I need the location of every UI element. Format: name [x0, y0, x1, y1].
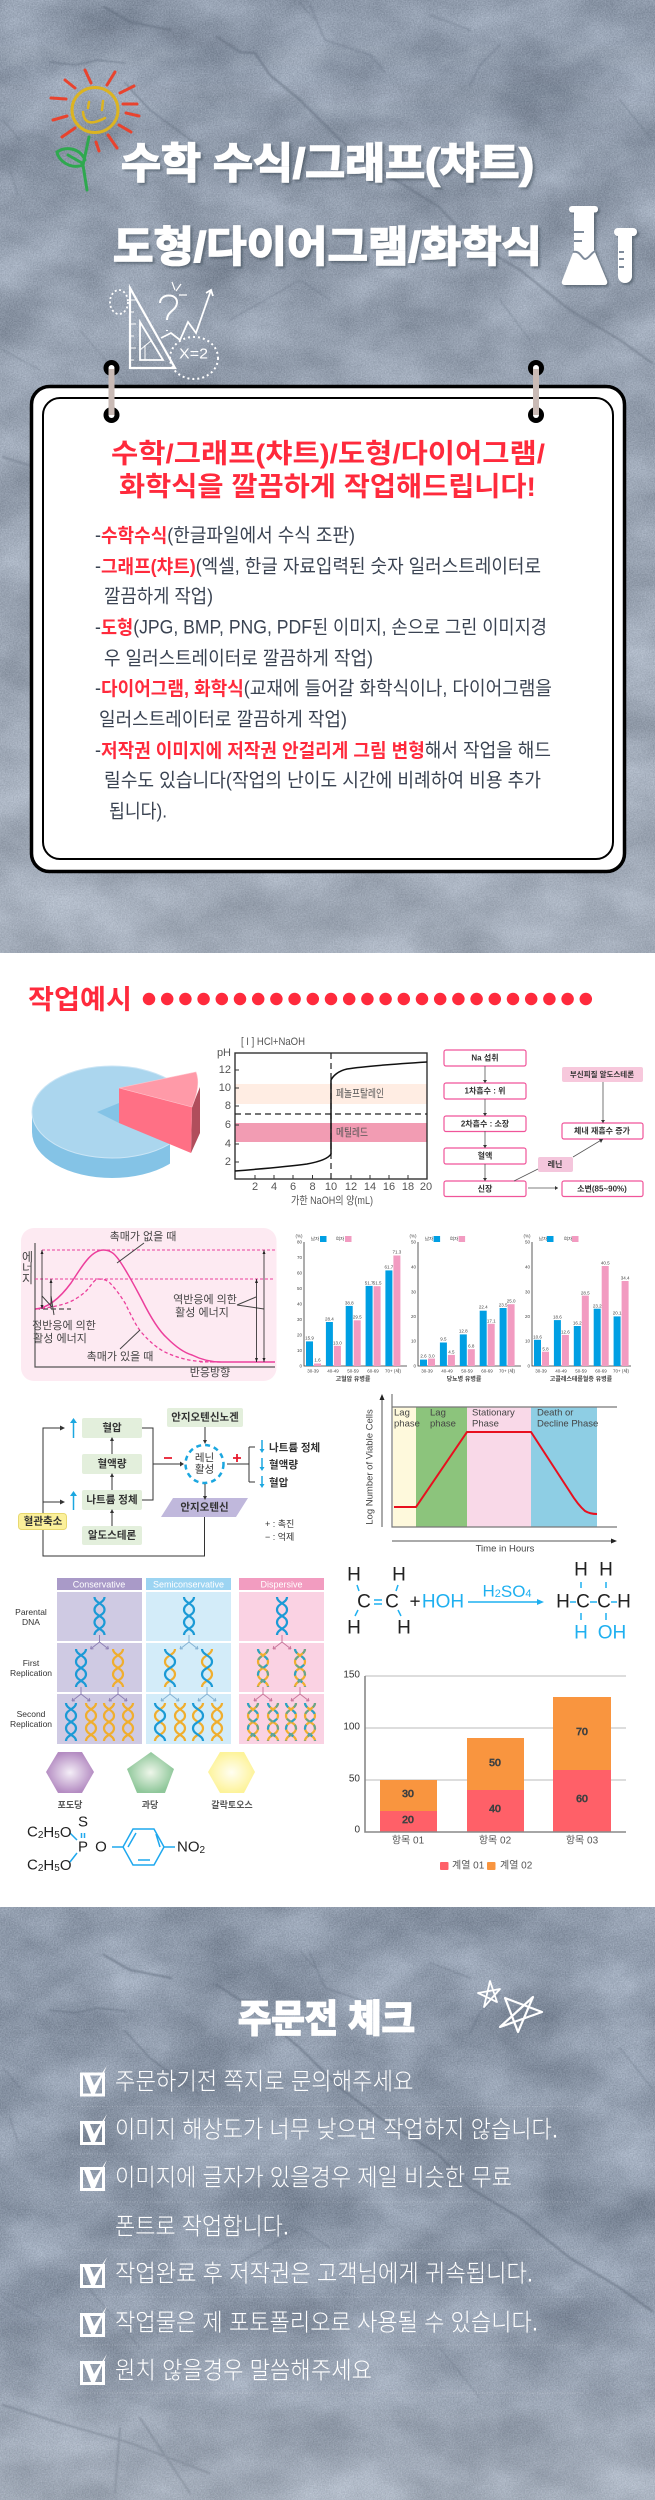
chart: diabetes prevalence bars: 10 — [411, 1338, 416, 1344]
chart: bacterial growth curve: Lag — [394, 1408, 410, 1418]
chart: diabetes prevalence bars: 20 — [411, 1314, 416, 1319]
chart: bacterial growth curve — [364, 1394, 617, 1554]
card body text: 됩니다). — [109, 800, 167, 822]
chart: cholesterol prevalence bars: 남자 — [539, 1236, 548, 1242]
chart: titration curve: 4 — [225, 1138, 231, 1150]
chart: hypertension prevalence bars: 29.5 — [353, 1314, 362, 1320]
chart: catalyst energy diagram: 활성 에너지 — [175, 1305, 229, 1319]
icon: right hanger ring — [528, 360, 544, 423]
chart: diabetes prevalence bars: 당뇨병 유병률 — [447, 1375, 482, 1383]
chart: diabetes prevalence bars: 50 — [411, 1240, 416, 1244]
chart: hypertension prevalence bars: 51.5 — [373, 1280, 382, 1286]
chart: diabetes prevalence bars: 12.8 — [459, 1328, 468, 1334]
list: checklist: 이미지 해상도가 너무 낮으면 작업하지 않습니다. — [115, 2116, 558, 2144]
chart: titration curve: 4 — [271, 1181, 277, 1193]
chart: diabetes prevalence bars: 40-49 — [441, 1368, 453, 1374]
formula: parathion structure: S — [78, 1814, 88, 1830]
chart: titration curve: 16 — [383, 1181, 395, 1193]
chart: hypertension prevalence bars: 10 — [297, 1348, 302, 1353]
diagram: sodium flow chart: 체내 재흡수 증가 — [574, 1126, 631, 1136]
chart: titration curve: 10 — [219, 1082, 231, 1094]
chart: catalyst energy diagram: 너 — [22, 1261, 33, 1275]
chart: titration curve: 18 — [402, 1181, 414, 1193]
chart: cholesterol prevalence bars: 10 — [525, 1338, 530, 1344]
chart: cholesterol prevalence bars: 20.1 — [613, 1310, 622, 1316]
formula: ethene hydration: SO — [501, 1582, 525, 1600]
chart: cholesterol prevalence bars: 50-59 — [575, 1368, 587, 1374]
chart: cholesterol prevalence bars: 0 — [527, 1364, 530, 1368]
chart: hypertension prevalence bars: 30 — [297, 1317, 302, 1322]
chart: hypertension prevalence bars: 1.6 — [314, 1358, 321, 1362]
formula: parathion structure — [27, 1814, 206, 1874]
chart: hypertension prevalence bars: 70 — [297, 1255, 302, 1260]
chart: titration curve: 8 — [225, 1100, 231, 1112]
icon: sunflower doodle — [51, 70, 139, 190]
icon: fructose pentagon: 과당 — [142, 1799, 159, 1810]
formula: ethene hydration: OH — [598, 1622, 626, 1644]
chart: diabetes prevalence bars: 30-39 — [421, 1368, 433, 1374]
chart: stacked bars: 150 — [343, 1670, 360, 1680]
chart: titration curve — [217, 1036, 432, 1207]
chart: hypertension prevalence bars: 50-59 — [347, 1368, 359, 1374]
chart: cholesterol prevalence bars: 5.8 — [542, 1346, 549, 1352]
chart: bacterial growth curve: Phase — [472, 1418, 499, 1430]
chart: hypertension prevalence bars: 0 — [299, 1364, 302, 1368]
diagram: renin angiotensin: 혈압 — [269, 1476, 289, 1489]
chart: bacterial growth curve: phase — [430, 1418, 456, 1430]
formula: ethene hydration: + — [409, 1592, 421, 1612]
chart: cholesterol prevalence bars: 30-39 — [535, 1368, 547, 1374]
chart: catalyst energy diagram: 지 — [22, 1272, 33, 1286]
icon: math doodle — [110, 282, 218, 379]
list: checklist: 작업완료 후 저작권은 고객님에게 귀속됩니다. — [115, 2260, 533, 2288]
chart: titration curve: 12 — [345, 1181, 357, 1193]
diagram: DNA replication models: Replication — [10, 1719, 52, 1729]
chart: stacked bars: 항목 03 — [566, 1834, 599, 1846]
card body text — [95, 524, 552, 822]
chart: bacterial growth curve: Death or — [537, 1408, 573, 1418]
card body text: 일러스트레이터로 깔끔하게 작업) — [99, 708, 347, 730]
chart: hypertension prevalence bars: 28.4 — [325, 1316, 334, 1322]
icon: math doodle: X=2 — [179, 346, 208, 362]
chart: diabetes prevalence bars: 40 — [411, 1264, 416, 1270]
chart: hypertension prevalence bars: 20 — [297, 1332, 302, 1338]
icon: left hanger ring — [104, 360, 120, 423]
formula: ethene hydration: C — [357, 1592, 371, 1612]
chart: diabetes prevalence bars: 2.6 — [420, 1354, 427, 1358]
chart: diabetes prevalence bars — [410, 1234, 521, 1383]
formula: parathion structure: 5 — [54, 1830, 60, 1840]
chart: cholesterol prevalence bars: 34.4 — [621, 1276, 630, 1280]
chart: catalyst energy diagram: 정반응에 의한 — [32, 1319, 96, 1332]
formula: ethene hydration: C — [597, 1592, 611, 1612]
title: line 1: 수학 수식/그래프(챠트) — [121, 140, 534, 187]
diagram: renin angiotensin: 혈액량 — [269, 1458, 298, 1471]
chart: stacked bars: 50 — [349, 1774, 360, 1784]
chart: stacked bars: 항목 01 — [392, 1834, 425, 1846]
chart: stacked bars: 20 — [402, 1814, 414, 1826]
icon: galactose hexagon: 갈락토오스 — [211, 1799, 253, 1810]
panel: bottom marble background — [0, 1907, 655, 2500]
chart: titration curve: 페놀프탈레인 — [336, 1087, 384, 1100]
chart: cholesterol prevalence bars: 50 — [525, 1240, 530, 1244]
chart: cholesterol prevalence bars: 10.6 — [533, 1334, 542, 1340]
chart: stacked bars: 30 — [402, 1788, 414, 1800]
list: checklist: 작업물은 제 포토폴리오로 사용될 수 있습니다. — [115, 2310, 538, 2336]
diagram: sodium flow chart: 혈액 — [478, 1150, 492, 1160]
chart: diabetes prevalence bars: 4.5 — [448, 1350, 455, 1354]
chart: titration curve: 14 — [364, 1181, 376, 1193]
chart: hypertension prevalence bars: 고혈압 유병률 — [336, 1375, 371, 1383]
chart: titration curve: [ I ] HCl+NaOH — [241, 1036, 305, 1048]
diagram: renin angiotensin: 나트륨 정체 — [86, 1493, 138, 1506]
icon: galactose hexagon — [208, 1752, 255, 1810]
formula: ethene hydration: H — [482, 1582, 495, 1600]
chart: titration curve: 8 — [309, 1181, 316, 1193]
chart: diabetes prevalence bars: 3.0 — [428, 1354, 435, 1358]
chart: diabetes prevalence bars: 60-69 — [481, 1368, 493, 1374]
icon: glucose hexagon: 포도당 — [58, 1799, 83, 1810]
chart: cholesterol prevalence bars: 18.6 — [553, 1314, 562, 1320]
formula: parathion structure: C — [27, 1824, 38, 1840]
formula: ethene hydration — [347, 1560, 631, 1644]
diagram: renin angiotensin: 안지오텐신노겐 — [171, 1410, 239, 1424]
chart: cholesterol prevalence bars — [524, 1234, 631, 1383]
diagram: renin angiotensin — [18, 1408, 320, 1556]
formula: parathion structure: C — [27, 1856, 38, 1874]
formula: parathion structure: 5 — [54, 1862, 60, 1874]
chart: catalyst energy diagram — [21, 1228, 276, 1381]
chart: bacterial growth curve: Log Number of Viable Cells — [364, 1409, 376, 1525]
chart: stacked bars: 40 — [489, 1803, 501, 1815]
chart: titration curve: 20 — [420, 1181, 432, 1193]
chart: stacked bars: 항목 02 — [479, 1834, 512, 1846]
card body text: -도형(JPG, BMP, PNG, PDF된 이미지, 손으로 그린 이미지경 — [95, 616, 547, 638]
card heading — [111, 439, 546, 502]
chart: stacked bars: 0 — [354, 1824, 360, 1836]
chart: hypertension prevalence bars: (%) — [296, 1234, 303, 1238]
diagram: renin angiotensin: + : 촉진 — [265, 1519, 294, 1529]
diagram: DNA replication models: Replication — [10, 1668, 52, 1678]
heading: pre-order check: 주문전 체크 — [238, 1999, 415, 2041]
formula: ethene hydration: H — [392, 1564, 406, 1586]
chart: stacked bars — [343, 1670, 626, 1872]
chart: cholesterol prevalence bars: 23.2 — [593, 1304, 602, 1308]
chart: hypertension prevalence bars: 40 — [297, 1302, 302, 1306]
chart: hypertension prevalence bars: 60 — [297, 1270, 302, 1276]
chart: titration curve: 2 — [225, 1156, 231, 1168]
chart: diabetes prevalence bars: 9.5 — [440, 1336, 447, 1342]
chart: bacterial growth curve: Time in Hours — [476, 1544, 535, 1554]
chart: stacked bars: 계열 02 — [500, 1860, 533, 1872]
chart: 3D pie — [32, 1066, 200, 1178]
diagram: sodium flow chart: 부신피질 알도스테론 — [570, 1069, 634, 1079]
formula: parathion structure: O — [95, 1838, 107, 1856]
formula: parathion structure: 2 — [38, 1830, 44, 1840]
chart: cholesterol prevalence bars: 여자 — [564, 1236, 573, 1242]
formula: parathion structure: NO — [177, 1838, 200, 1856]
chart: cholesterol prevalence bars: 40.5 — [601, 1260, 610, 1266]
card body text: -그래프(챠트)(엑셀, 한글 자료입력된 숫자 일러스트레이터로 — [95, 556, 541, 578]
formula: parathion structure: P — [78, 1838, 88, 1856]
diagram: sodium flow chart: 1차흡수 : 위 — [464, 1086, 506, 1096]
diagram: renin angiotensin: 레닌 — [195, 1452, 214, 1464]
chart: cholesterol prevalence bars: 12.6 — [561, 1330, 570, 1334]
icon: flask and test tube — [562, 206, 637, 285]
chart: diabetes prevalence bars: 22.4 — [479, 1304, 488, 1310]
chart: titration curve: 10 — [325, 1181, 337, 1193]
chart: cholesterol prevalence bars: 20 — [525, 1314, 530, 1319]
formula: parathion structure: O — [60, 1824, 71, 1840]
diagram: DNA replication models: Second — [17, 1709, 46, 1719]
chart: catalyst energy diagram: 반응방향 — [190, 1366, 230, 1379]
formula: parathion structure: H — [43, 1856, 54, 1874]
chart: diabetes prevalence bars: 70+ (세) — [499, 1368, 516, 1374]
heading: work examples: 작업예시 — [28, 985, 132, 1015]
chart: diabetes prevalence bars: (%) — [410, 1234, 417, 1238]
diagram: DNA replication models: First — [23, 1658, 40, 1668]
formula: parathion structure: H — [43, 1824, 54, 1840]
diagram: renin angiotensin: 혈압 — [102, 1421, 122, 1434]
list: checklist: 폰트로 작업합니다. — [115, 2214, 289, 2240]
card body text: 릴수도 있습니다(작업의 난이도 시간에 비례하여 비용 추가 — [104, 770, 541, 792]
chart: bacterial growth curve: phase — [394, 1418, 420, 1430]
diagram: DNA replication models: DNA — [22, 1617, 40, 1627]
panel: top marble background — [0, 0, 655, 953]
chart: cholesterol prevalence bars: 30 — [525, 1290, 530, 1294]
chart: titration curve: 12 — [219, 1064, 231, 1076]
chart: diabetes prevalence bars: 남자 — [425, 1236, 434, 1242]
chart: hypertension prevalence bars — [296, 1234, 407, 1383]
chart: catalyst energy diagram: 활성 에너지 — [33, 1331, 87, 1345]
chart: titration curve: 메틸레드 — [336, 1126, 368, 1139]
formula: parathion structure: 2 — [200, 1844, 206, 1856]
chart: titration curve: 가한 NaOH의 양(mL) — [291, 1194, 373, 1207]
chart: catalyst energy diagram: 촉매가 없을 때 — [110, 1230, 176, 1243]
chart: titration curve: 6 — [225, 1119, 231, 1131]
chart: hypertension prevalence bars: 80 — [297, 1240, 302, 1244]
chart: hypertension prevalence bars: 70+ (세) — [385, 1368, 402, 1374]
list: checklist: 주문하기전 쪽지로 문의해주세요 — [115, 2068, 414, 2096]
card body text: -저작권 이미지에 저작권 안걸리게 그림 변형해서 작업을 해드 — [95, 740, 551, 762]
chart: cholesterol prevalence bars: 16.2 — [573, 1320, 582, 1326]
list: checklist: 원치 않을경우 말씀해주세요 — [115, 2358, 372, 2384]
chart: stacked bars: 60 — [576, 1793, 588, 1805]
chart: hypertension prevalence bars: 13.0 — [333, 1340, 342, 1346]
chart: hypertension prevalence bars: 50 — [297, 1286, 302, 1291]
card body text: 깔끔하게 작업) — [104, 586, 213, 608]
diagram: renin angiotensin: 알도스테론 — [88, 1528, 136, 1542]
diagram: sodium flow chart: 소변(85~90%) — [577, 1184, 627, 1194]
icon: fructose pentagon — [127, 1752, 174, 1810]
chart: diabetes prevalence bars: 23.5 — [499, 1302, 508, 1308]
formula: ethene hydration: H — [556, 1592, 570, 1612]
diagram: sodium flow chart: 신장 — [478, 1184, 493, 1194]
chart: diabetes prevalence bars: 30 — [411, 1290, 416, 1294]
chart: bacterial growth curve: Decline Phase — [537, 1418, 598, 1430]
chart: bacterial growth curve: Lag — [430, 1408, 446, 1418]
chart: cholesterol prevalence bars: 60-69 — [595, 1368, 607, 1374]
chart: cholesterol prevalence bars: 고콜레스테롤혈증 유병률 — [550, 1375, 613, 1383]
diagram: renin angiotensin: 활성 — [195, 1462, 214, 1476]
chart: diabetes prevalence bars: 0 — [413, 1364, 416, 1368]
chart: cholesterol prevalence bars: 40-49 — [555, 1368, 567, 1374]
list: checklist — [72, 2066, 584, 2393]
formula: ethene hydration: H — [574, 1622, 588, 1644]
card body text: -다이어그램, 화학식(교재에 들어갈 화학식이나, 다이어그램을 — [95, 678, 552, 700]
title: line 2: 도형/다이어그램/화학식 — [113, 224, 542, 270]
formula: ethene hydration: 4 — [525, 1588, 532, 1600]
list: checklist: 이미지에 글자가 있을경우 제일 비슷한 무료 — [115, 2164, 512, 2192]
formula: ethene hydration: H — [574, 1560, 588, 1580]
chart: hypertension prevalence bars: 61.7 — [385, 1264, 394, 1270]
formula: ethene hydration: H — [599, 1560, 613, 1580]
panel: notice card — [32, 386, 624, 872]
chart: stacked bars: 계열 01 — [452, 1860, 485, 1872]
diagram: renin angiotensin: 안지오텐신 — [180, 1500, 229, 1514]
chart: titration curve: pH — [217, 1047, 231, 1059]
formula: ethene hydration: HOH — [422, 1592, 464, 1612]
chart: cholesterol prevalence bars: (%) — [524, 1234, 531, 1238]
diagram: renin angiotensin: − : 억제 — [265, 1531, 294, 1542]
chart: hypertension prevalence bars: 51.7 — [365, 1280, 374, 1286]
formula: ethene hydration: H — [347, 1618, 361, 1638]
chart: titration curve: 2 — [252, 1181, 258, 1193]
diagram: DNA replication models: Parental — [15, 1607, 47, 1617]
diagram: DNA replication models: Dispersive — [260, 1580, 303, 1590]
diagram: renin angiotensin: 혈액량 — [98, 1457, 127, 1470]
formula: parathion structure: O — [60, 1856, 71, 1874]
chart: catalyst energy diagram: 역반응에 의한 — [173, 1293, 237, 1306]
icon: doodle stars — [478, 1981, 542, 2032]
formula: parathion structure: 2 — [38, 1862, 44, 1874]
chart: hypertension prevalence bars: 60-69 — [367, 1368, 379, 1374]
chart: cholesterol prevalence bars: 70+ (세) — [613, 1368, 630, 1374]
chart: catalyst energy diagram: 에 — [22, 1250, 33, 1264]
chart: hypertension prevalence bars: 남자 — [311, 1236, 320, 1242]
chart: cholesterol prevalence bars: 40 — [525, 1264, 530, 1270]
chart: diabetes prevalence bars: 25.0 — [507, 1298, 516, 1304]
chart: hypertension prevalence bars: 71.3 — [393, 1250, 402, 1254]
chart: hypertension prevalence bars: 40-49 — [327, 1368, 339, 1374]
card body text: -수학수식(한글파일에서 수식 조판) — [95, 524, 355, 546]
chart: diabetes prevalence bars: 6.8 — [468, 1344, 475, 1348]
chart: catalyst energy diagram: 촉매가 있을 때 — [87, 1350, 153, 1363]
chart: diabetes prevalence bars: 여자 — [450, 1236, 459, 1242]
formula: ethene hydration: H — [347, 1564, 361, 1586]
formula: ethene hydration: H — [617, 1592, 631, 1612]
chart: hypertension prevalence bars: 여자 — [336, 1236, 345, 1242]
icon: glucose hexagon — [46, 1752, 94, 1810]
formula: ethene hydration: 2 — [495, 1588, 501, 1600]
formula: ethene hydration: C — [576, 1592, 590, 1612]
formula: ethene hydration: C — [385, 1592, 399, 1612]
formula: ethene hydration: H — [397, 1618, 411, 1638]
card heading: 화학식을 깔끔하게 작업해드립니다! — [119, 472, 536, 502]
card body text: 우 일러스트레이터로 깔끔하게 작업) — [104, 648, 373, 670]
chart: hypertension prevalence bars: 15.9 — [305, 1336, 314, 1340]
chart: stacked bars: 70 — [576, 1726, 588, 1738]
diagram: renin angiotensin: 나트륨 정체 — [269, 1441, 320, 1454]
chart: stacked bars: 50 — [489, 1757, 501, 1769]
chart: bacterial growth curve: Stationary — [472, 1408, 515, 1418]
diagram: sodium flow chart — [444, 1050, 643, 1196]
diagram: sodium flow chart: Na 섭취 — [471, 1052, 499, 1062]
chart: cholesterol prevalence bars: 28.5 — [581, 1290, 590, 1296]
chart: hypertension prevalence bars: 38.8 — [345, 1300, 354, 1306]
chart: diabetes prevalence bars: 50-59 — [461, 1368, 473, 1374]
chart: diabetes prevalence bars: 17.1 — [487, 1318, 496, 1324]
card heading: 수학/그래프(챠트)/도형/다이어그램/ — [111, 439, 546, 469]
chart: hypertension prevalence bars: 30-39 — [307, 1368, 319, 1374]
diagram: sodium flow chart: 레닌 — [548, 1159, 562, 1169]
diagram: DNA replication models: Semiconservative — [153, 1580, 224, 1590]
chart: stacked bars: 100 — [343, 1722, 360, 1732]
diagram: renin angiotensin: 혈관축소 — [24, 1514, 63, 1528]
diagram: sodium flow chart: 2차흡수 : 소장 — [461, 1118, 510, 1128]
chart: titration curve: 6 — [290, 1181, 296, 1193]
diagram: DNA replication models: Conservative — [73, 1580, 125, 1590]
diagram: DNA replication models — [10, 1578, 324, 1744]
